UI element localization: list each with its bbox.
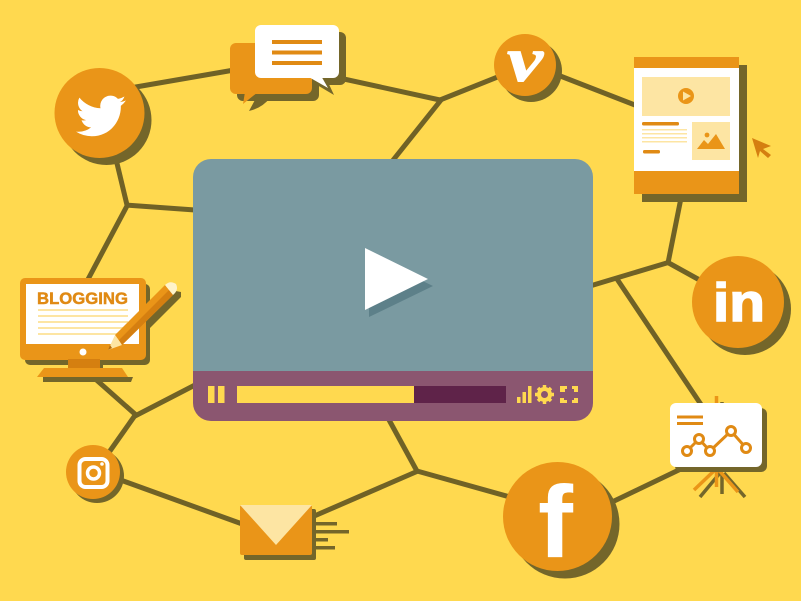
text lines [642, 122, 687, 154]
speed lines [316, 522, 349, 550]
icon: envelope [240, 505, 349, 560]
icon: fullscreen [560, 386, 578, 403]
icon: presentation board [670, 396, 767, 497]
panel: web page mockup [634, 57, 747, 202]
icon: cursor arrow [752, 138, 771, 158]
icon: facebook: f [538, 465, 574, 579]
icon: linkedin: in [713, 273, 765, 333]
icon: pause [208, 386, 224, 403]
tripod [694, 396, 745, 497]
icon: linkedin [692, 256, 791, 355]
icon: pencil [108, 282, 181, 350]
icon: play button [365, 248, 433, 317]
icon: twitter [54, 68, 152, 165]
icon: instagram [66, 445, 124, 503]
line chart [682, 426, 750, 456]
icon: volume signal [517, 386, 532, 403]
text lines [38, 309, 128, 335]
network connector lines [85, 68, 705, 525]
icon: settings gear [535, 385, 554, 404]
icon: vimeo [494, 24, 562, 102]
heading: BLOGGING: BLOGGING [37, 289, 128, 308]
progress bar [237, 386, 506, 403]
icon: facebook [503, 462, 620, 579]
panel: video player [193, 159, 593, 421]
icon: vimeo: v [507, 24, 544, 95]
video thumbnail [642, 77, 730, 116]
icon: blogging monitor [20, 278, 181, 382]
icon: chat bubbles [230, 25, 346, 111]
image thumbnail [692, 122, 730, 160]
